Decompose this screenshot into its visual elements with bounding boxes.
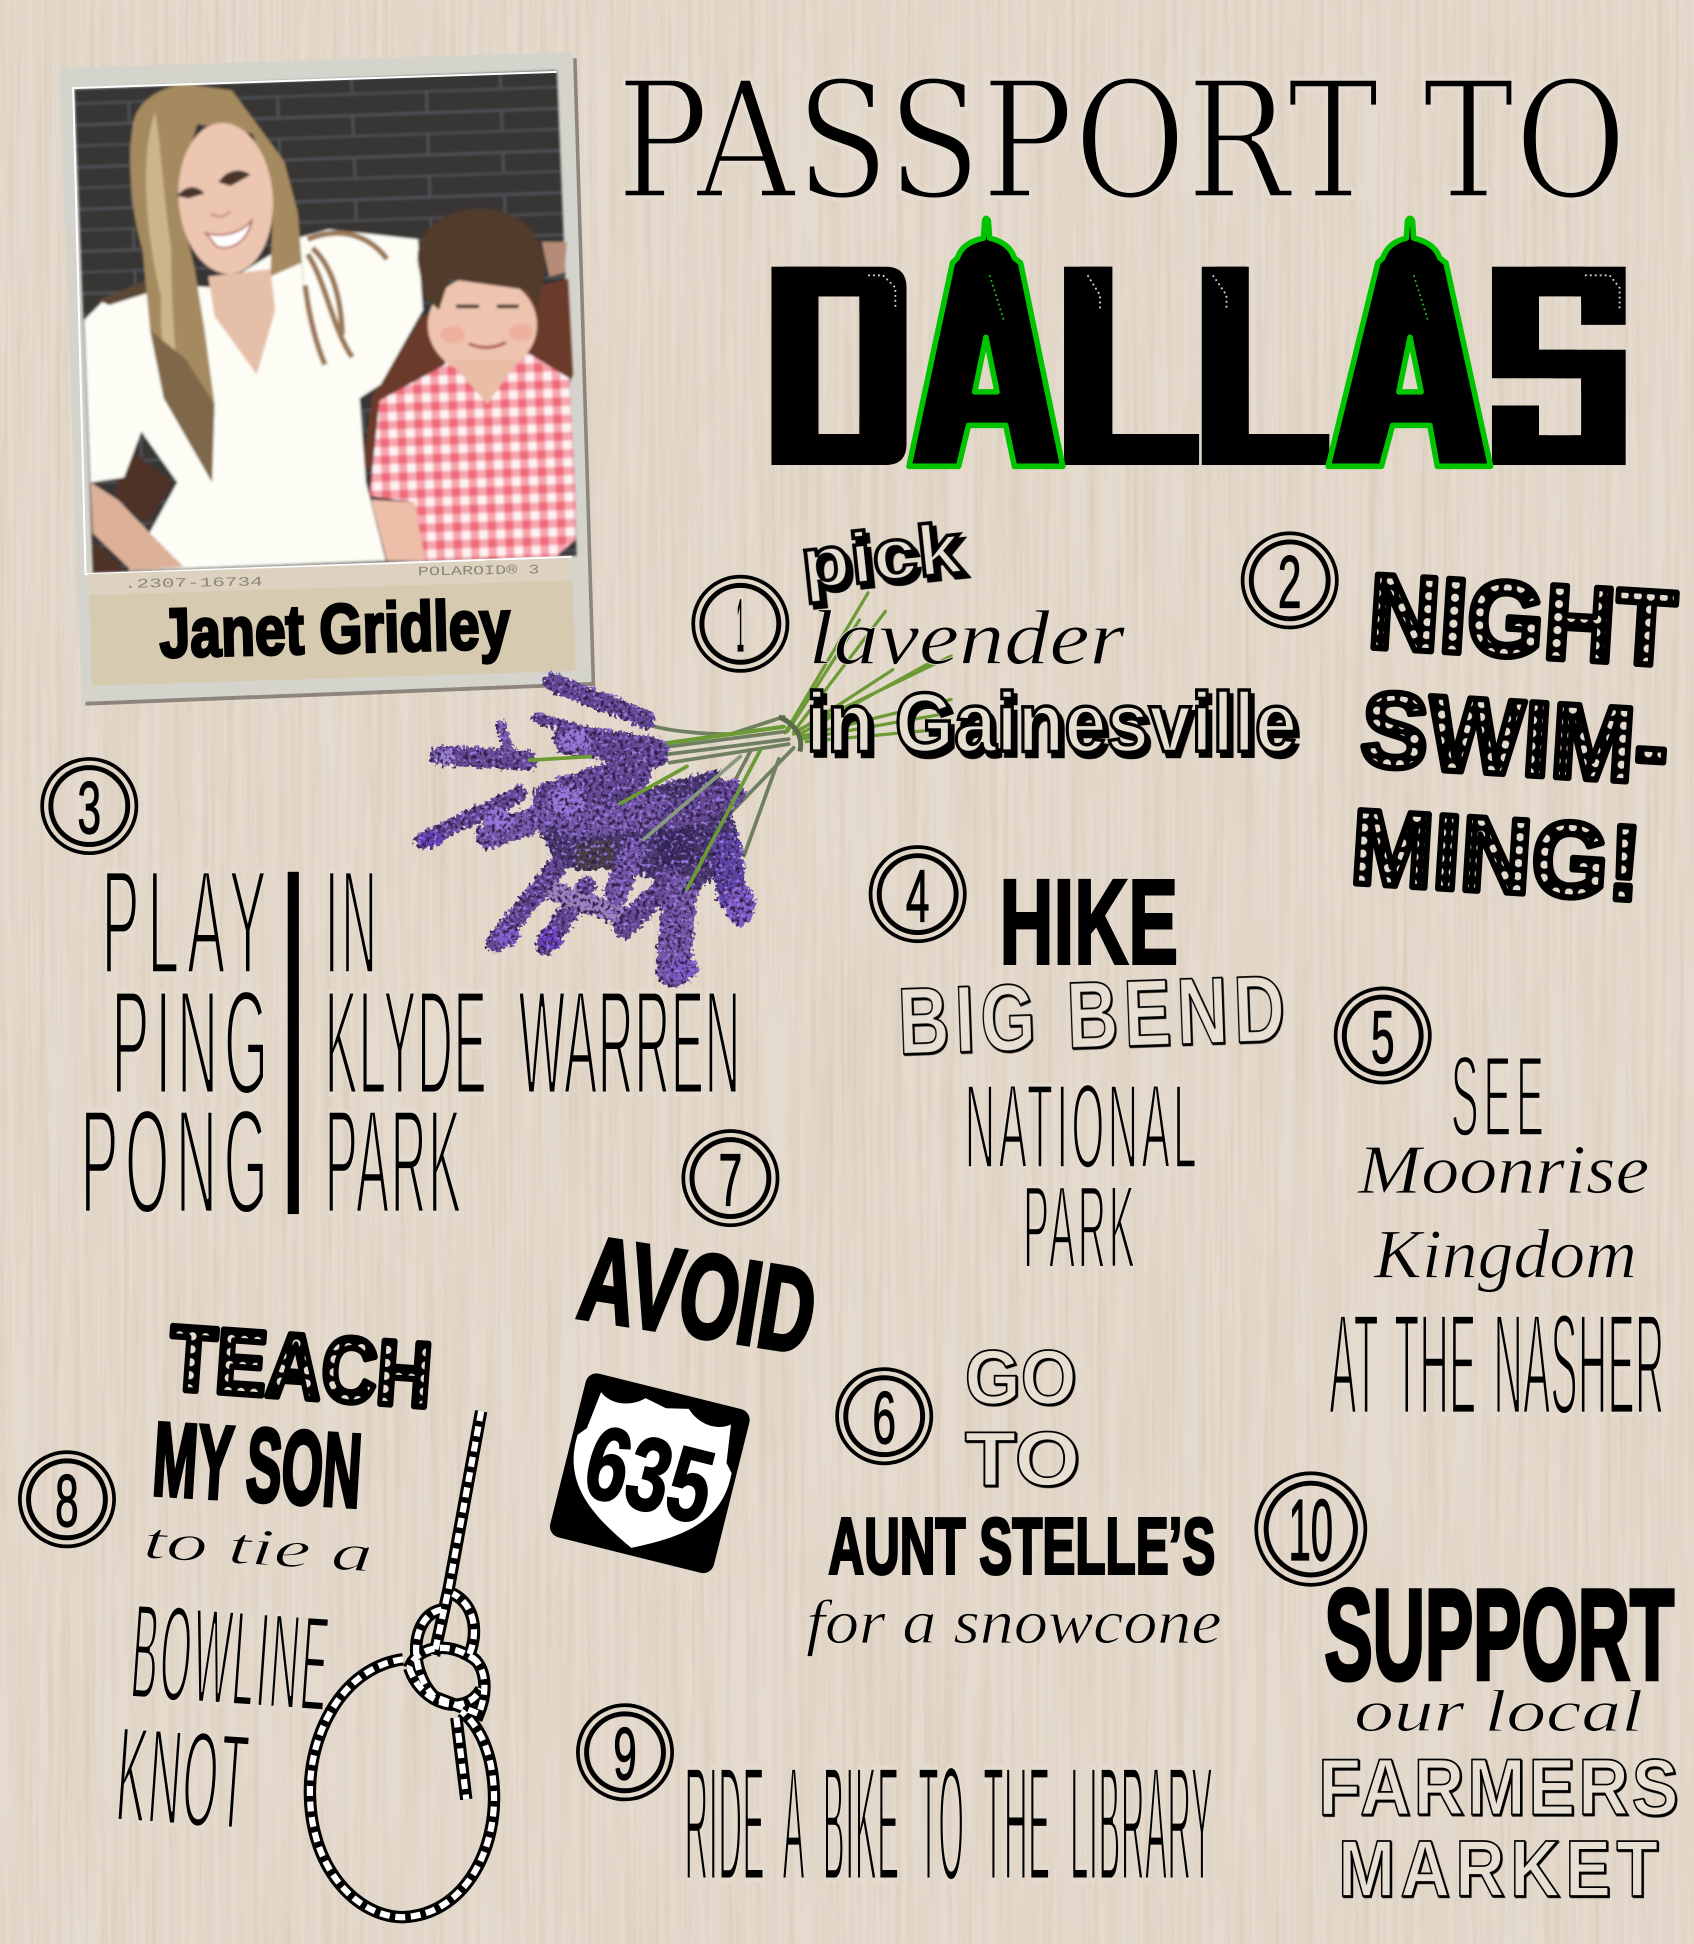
badge 1 [693,577,787,671]
green stems over flowers [530,750,760,889]
step 8: teach my son to tie a bowline knot: BOWLINE [127,1576,333,1741]
badge 8 [20,1452,114,1546]
badge 5 [1336,988,1430,1083]
step 1: pick lavender in Gainesville: pick [797,508,967,605]
badge 4: 4 [906,854,929,937]
badge 3: 3 [78,766,101,849]
badge 5: 5 [1371,996,1395,1079]
step 5: see Moonrise Kingdom at the Nasher: AT THE NASHER [1329,1284,1664,1445]
badge 10: 10 [1288,1482,1333,1579]
badge 7 [683,1131,778,1225]
step 6: go to Aunt Stelle's for a snowcone: AUNT STELLE’S [828,1502,1215,1591]
badge 3 [42,759,136,853]
step 10: support our local farmers market: FARMERS [1318,1742,1678,1831]
title: dallas with skyscraper letters: L [1202,204,1331,527]
step 5: see Moonrise Kingdom at the Nasher [1329,988,1664,1445]
badge 9: 9 [613,1713,637,1796]
badge 8: 8 [55,1460,79,1543]
polaroid mark: POLAROID® 3 [418,562,540,579]
step 7: avoid 635 [548,1131,825,1575]
highway sign: 635 [574,1404,725,1547]
tower letter A [1325,216,1494,470]
title: dallas with skyscraper letters: L [1064,204,1200,527]
step 3: play ping pong in Klyde Warren Park: PLAY [102,839,267,1005]
step 3: play ping pong in Klyde Warren Park: PARK [325,1080,461,1245]
step 6: go to Aunt Stelle's for a snowcone: GO [965,1335,1076,1421]
caption strip [88,558,575,686]
badge 4 [871,847,965,941]
name: Janet Gridley [158,585,512,672]
film number: .2307-16734 [124,574,263,592]
stems [646,593,951,893]
step 4: hike Big Bend National Park: HIKE [1000,856,1178,990]
step 8: teach my son to tie a bowline knot [20,1307,494,1917]
step 2: night swimming [1243,533,1680,924]
badge 10 [1256,1473,1365,1585]
step 2: night swimming: NIGHT [1365,551,1680,689]
step 4: hike Big Bend National Park [871,847,1286,1293]
title: dallas with skyscraper letters: D [771,204,907,527]
step 7: avoid 635: AVOID [571,1211,825,1380]
step 5: see Moonrise Kingdom at the Nasher: Moonrise [1357,1132,1649,1209]
step 10: support our local farmers market: MARKET [1338,1824,1658,1913]
tower letter A: A [924,204,1048,527]
photo [73,71,577,574]
tower letter A: A [1346,204,1474,527]
title: dallas with skyscraper letters [769,204,1631,527]
tower letter A [906,216,1066,470]
step 4: hike Big Bend National Park: BIG BEND [896,956,1286,1074]
step 8: teach my son to tie a bowline knot: to tie a [142,1513,374,1584]
rope knot illustration [310,1411,494,1917]
step 10: support our local farmers market: our local [1354,1678,1643,1744]
badge 6: 6 [872,1376,896,1459]
step 6: go to Aunt Stelle's for a snowcone: TO [965,1417,1080,1503]
step 4: hike Big Bend National Park: PARK [1023,1161,1135,1293]
step 8: teach my son to tie a bowline knot: KNOT [112,1697,253,1859]
step 1: pick lavender in Gainesville: in Gainesville [806,676,1297,770]
badge 2: 2 [1278,541,1302,624]
step 6: go to Aunt Stelle's for a snowcone [806,1335,1222,1657]
step 2: night swimming: MING! [1348,786,1645,924]
step 10: support our local farmers market [1256,1473,1678,1913]
badge 1: 1 [737,584,744,667]
step 6: go to Aunt Stelle's for a snowcone: for a snowcone [806,1589,1222,1657]
step 1: pick lavender in Gainesville: lavender [809,594,1126,680]
step 3: play ping pong in Klyde Warren Park: KLYDE WARREN [325,961,740,1126]
badge 6 [837,1369,931,1463]
step 5: see Moonrise Kingdom at the Nasher: SEE [1451,1033,1544,1161]
polaroid photo card [60,52,595,706]
step 3: play ping pong in Klyde Warren Park [42,759,740,1245]
lavender bouquet [419,593,951,981]
step 8: teach my son to tie a bowline knot: TEACH [166,1307,435,1427]
step 8: teach my son to tie a bowline knot: MY SON [150,1402,365,1530]
badge 7: 7 [719,1138,742,1221]
step 2: night swimming: SWIM- [1358,668,1672,807]
step 3: play ping pong in Klyde Warren Park: PING [112,959,268,1126]
flower spikes [419,682,755,981]
step 9: ride a bike to the library: RIDE A BIKE TO THE LIBRARY [685,1733,1213,1916]
step 3: play ping pong in Klyde Warren Park: PONG [81,1078,268,1245]
title: dallas with skyscraper letters: S [1492,204,1626,527]
highway sign [548,1371,752,1575]
step 4: hike Big Bend National Park: NATIONAL [965,1060,1197,1195]
badge 2 [1243,533,1337,627]
badge 9 [578,1705,672,1799]
step 5: see Moonrise Kingdom at the Nasher: Kingdom [1373,1216,1637,1293]
step 3: play ping pong in Klyde Warren Park: IN [325,841,377,1006]
step 1: pick lavender in Gainesville [693,508,1297,770]
